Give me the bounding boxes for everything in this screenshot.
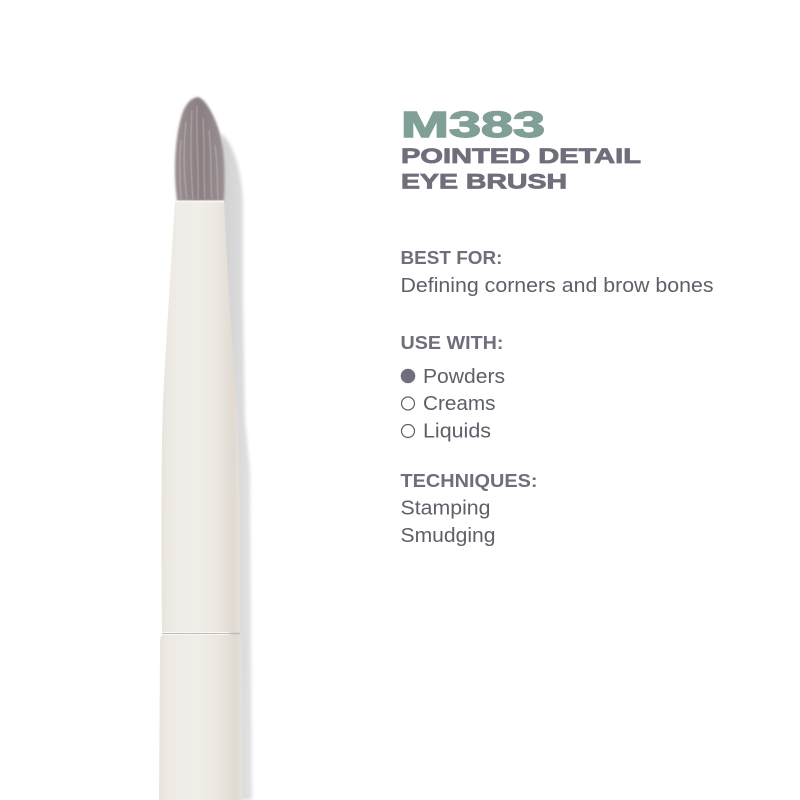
heading: TECHNIQUES:: [400, 470, 538, 491]
icon: filled radio: [401, 369, 415, 383]
section: techniques: [400, 470, 538, 547]
section: use with: [400, 332, 505, 442]
upper handle: [161, 202, 240, 632]
icon: empty radio: [402, 424, 414, 438]
heading: BEST FOR:: [400, 247, 502, 268]
icon: empty radio: [402, 397, 414, 410]
option: creams: Creams: [423, 393, 496, 415]
option: liquids: Liquids: [423, 420, 491, 442]
product name: [401, 145, 641, 194]
heading: USE WITH:: [400, 332, 504, 353]
ferrule top edge: [176, 200, 224, 202]
brush shadow: [221, 133, 252, 800]
brush illustration: [159, 97, 242, 800]
technique: smudging: Smudging: [400, 525, 496, 547]
option: powders: Powders: [423, 366, 505, 388]
bristles: [175, 97, 225, 201]
name line 1: POINTED DETAIL: [401, 145, 641, 168]
name line 2: EYE BRUSH: [401, 170, 567, 194]
description: Defining corners and brow bones: [400, 275, 714, 297]
section: best for: [400, 247, 714, 297]
handle seam: [162, 632, 240, 634]
product code: M383: [401, 104, 545, 145]
technique: stamping: Stamping: [400, 498, 490, 520]
lower handle: [159, 635, 242, 800]
